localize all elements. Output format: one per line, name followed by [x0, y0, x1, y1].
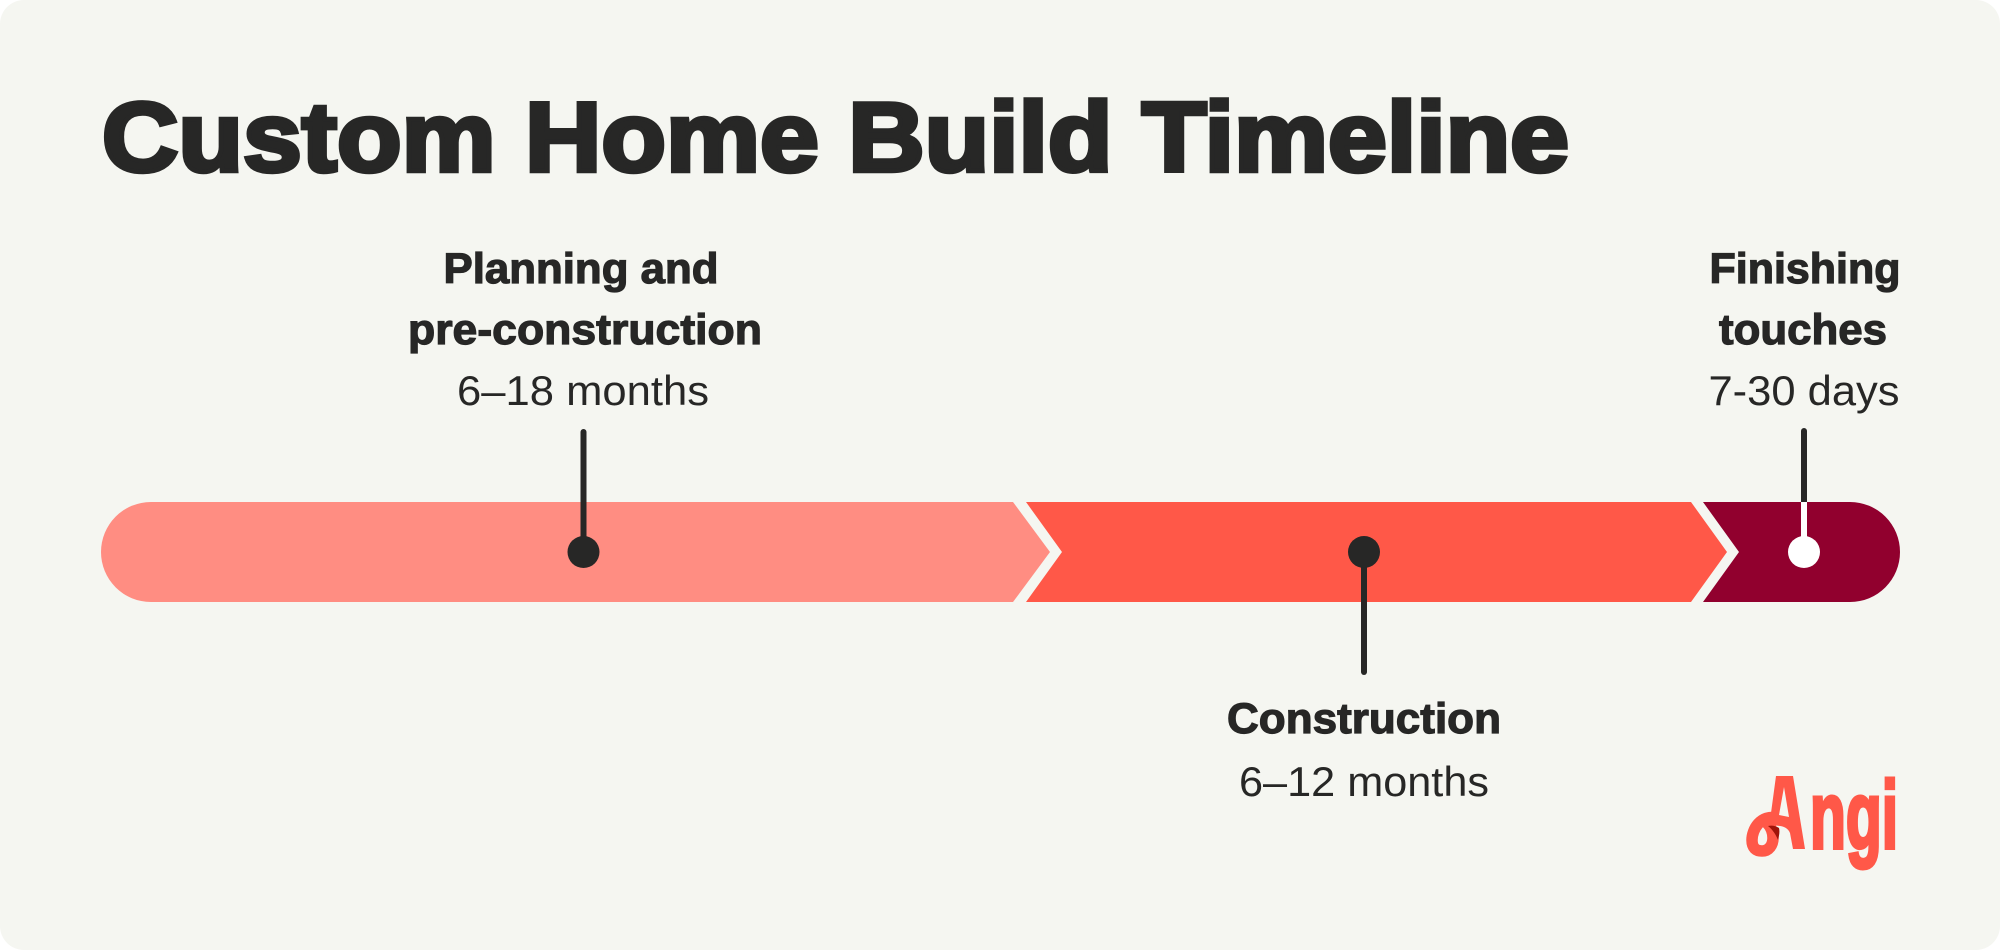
label: planning and pre-construction: 6–18 months: [457, 367, 709, 414]
label: planning and pre-construction: pre-construction: [408, 306, 762, 354]
label: planning and pre-construction: [408, 245, 762, 414]
logo: Angi: [1752, 762, 1898, 869]
title: Custom Home Build Timeline: [102, 82, 1569, 192]
logo: Angi: ngi: [1810, 762, 1898, 869]
marker: finishing touches: [1788, 431, 1820, 568]
segment: finishing touches: [1703, 502, 1900, 602]
label: finishing touches: touches: [1719, 306, 1887, 354]
label: finishing touches: [1708, 245, 1900, 414]
label: planning and pre-construction: Planning and: [444, 245, 718, 293]
label: construction: 6–12 months: [1239, 758, 1489, 805]
label: construction: [1227, 695, 1501, 805]
label: finishing touches: Finishing: [1710, 245, 1900, 293]
segment: construction: [1026, 502, 1727, 602]
marker: construction: [1348, 536, 1380, 672]
marker: planning: [568, 432, 600, 568]
label: construction: Construction: [1227, 695, 1501, 743]
segment: planning: [101, 502, 1050, 602]
label: finishing touches: 7-30 days: [1708, 367, 1900, 414]
timeline bar: [101, 502, 1900, 602]
